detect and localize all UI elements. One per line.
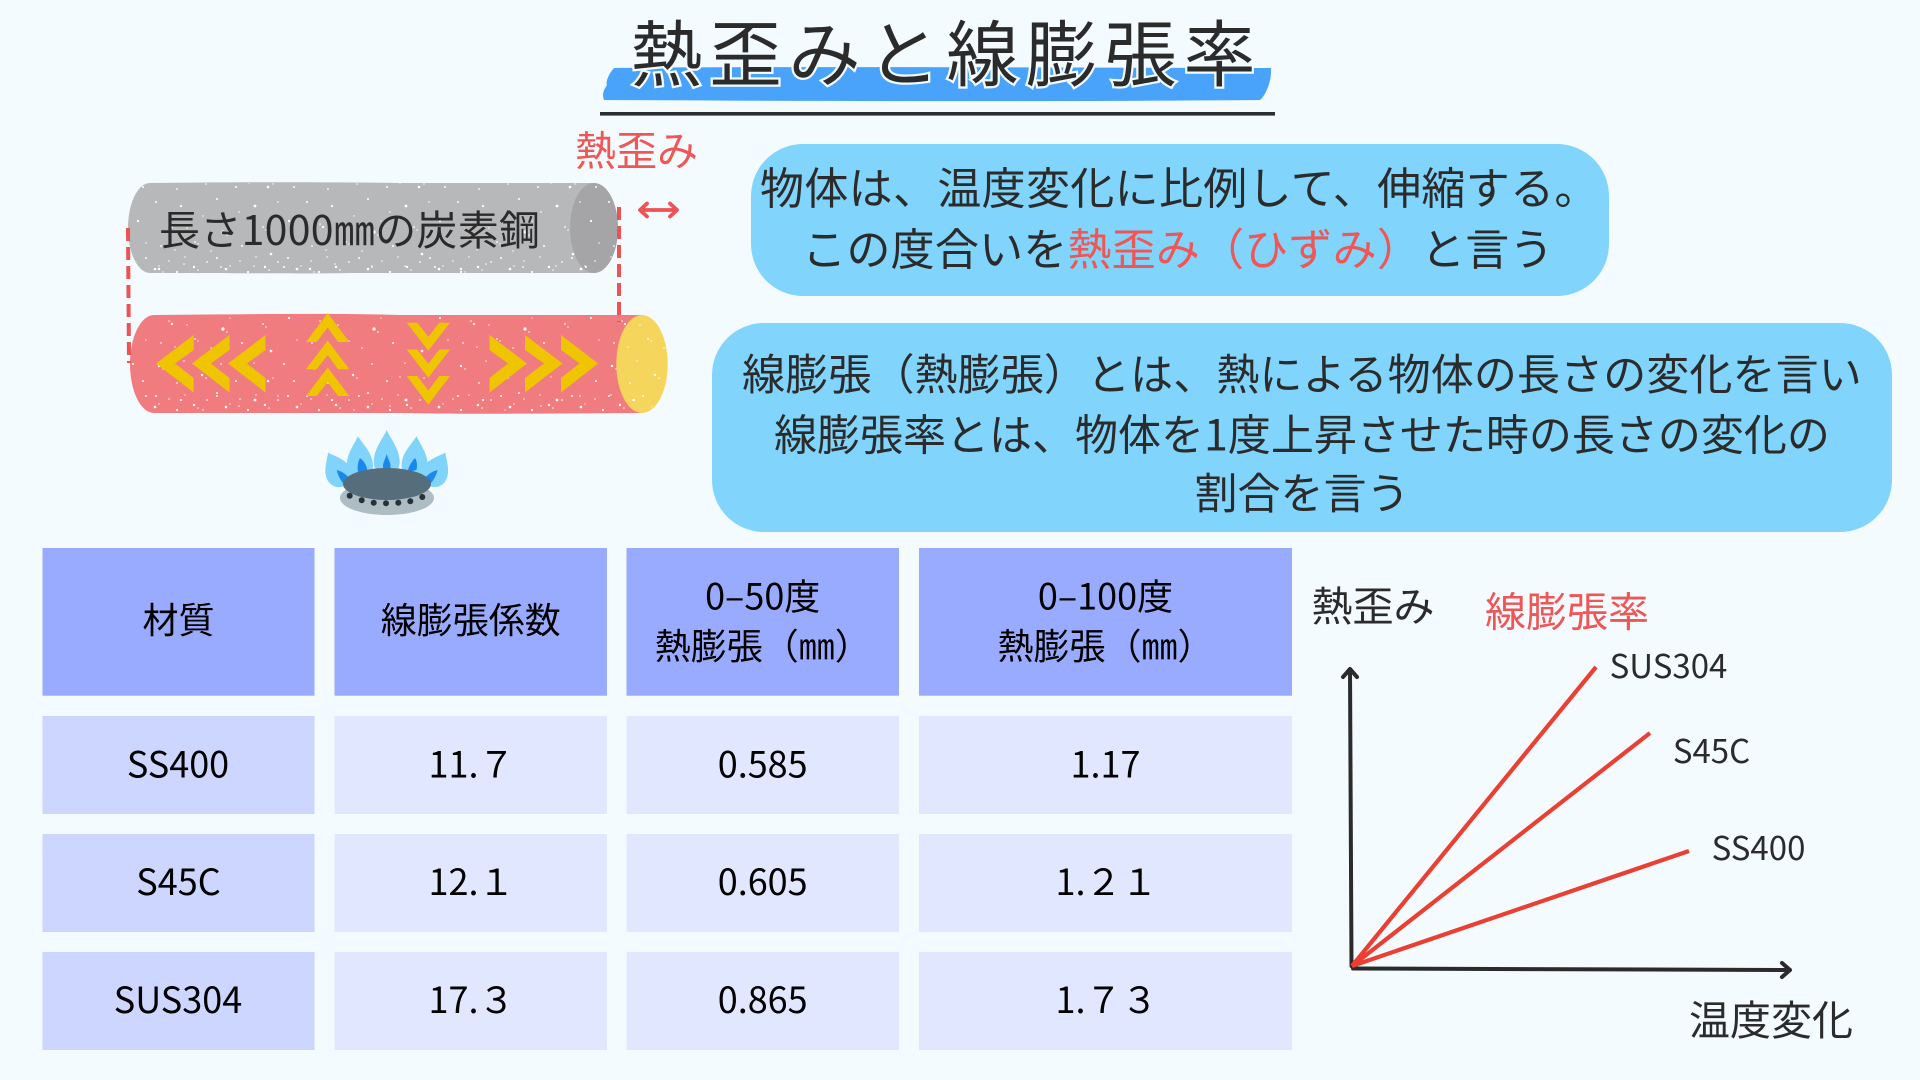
header row: 線膨張係数 xyxy=(381,592,561,644)
row: SUS304: 1.７３ xyxy=(1056,972,1158,1024)
title underline xyxy=(600,112,1275,116)
line SS400 xyxy=(1352,851,1689,966)
panel: linear expansion explanation xyxy=(712,323,1892,532)
row: S45C: 12.１ xyxy=(429,854,514,906)
row: S45C: S45C xyxy=(136,854,221,906)
strain label: 熱歪み xyxy=(575,118,698,178)
x axis arrow xyxy=(1353,963,1790,977)
title xyxy=(600,0,1275,116)
line SUS304 xyxy=(1352,667,1596,966)
icon: gas burner xyxy=(317,430,457,515)
dashed guide left xyxy=(128,228,129,363)
row: SUS304: 17.３ xyxy=(429,972,514,1024)
header row: 熱膨張（㎜） xyxy=(655,618,871,670)
label SUS304: SUS304 xyxy=(1610,640,1727,688)
table: expansion by material xyxy=(42,548,1292,1050)
header row: 0–50度 xyxy=(705,568,820,620)
chevrons right xyxy=(490,335,598,392)
cylinder label: 長さ1000㎜の炭素鋼 xyxy=(159,197,540,257)
x axis label: 温度変化 xyxy=(1689,987,1853,1047)
row: SS400: 0.585 xyxy=(718,736,808,788)
chevrons up xyxy=(306,313,349,396)
header row: 材質 xyxy=(142,592,215,644)
grey cylinder xyxy=(128,182,618,273)
title brush highlight xyxy=(603,67,1271,101)
header row: 熱膨張（㎜） xyxy=(997,618,1214,670)
chart: strain vs temperature xyxy=(1312,573,1853,1047)
panel: thermal strain explanation xyxy=(751,144,1609,296)
row: SUS304 xyxy=(42,952,1292,1050)
diagram: cylinders and burner xyxy=(128,118,698,515)
text line 2: この度合いを熱歪み（ひずみ）と言う xyxy=(802,214,1554,278)
row: SS400 xyxy=(42,716,1292,814)
y axis label: 熱歪み xyxy=(1312,573,1434,633)
text line 1: 線膨張（熱膨張）とは、熱による物体の長さの変化を言い xyxy=(742,341,1862,403)
line S45C xyxy=(1352,733,1650,966)
text line 1: 物体は、温度変化に比例して、伸縮する。 xyxy=(760,153,1599,217)
row: SUS304: 0.865 xyxy=(718,972,808,1024)
row: S45C xyxy=(42,834,1292,932)
heated red cylinder xyxy=(130,313,668,414)
row: SUS304: SUS304 xyxy=(114,972,242,1024)
chart title: 線膨張率 xyxy=(1485,578,1649,638)
row: SS400: 1.17 xyxy=(1071,736,1140,788)
row: SS400: SS400 xyxy=(127,736,229,788)
row: S45C: 1.２１ xyxy=(1056,854,1158,906)
strain arrow xyxy=(640,204,677,216)
chevrons left xyxy=(156,335,266,392)
label SS400: SS400 xyxy=(1712,822,1805,870)
text line 3: 割合を言う xyxy=(1194,460,1410,522)
header row: 0–100度 xyxy=(1038,568,1173,620)
text line 2: 線膨張率とは、物体を1度上昇させた時の長さの変化の xyxy=(774,402,1830,464)
y axis arrow xyxy=(1343,669,1357,966)
chevrons down xyxy=(407,323,450,405)
dashed guide right xyxy=(617,207,621,322)
label S45C: S45C xyxy=(1673,725,1750,773)
row: SS400: 11.７ xyxy=(429,736,514,788)
row: S45C: 0.605 xyxy=(718,854,808,906)
header row xyxy=(42,548,1292,696)
